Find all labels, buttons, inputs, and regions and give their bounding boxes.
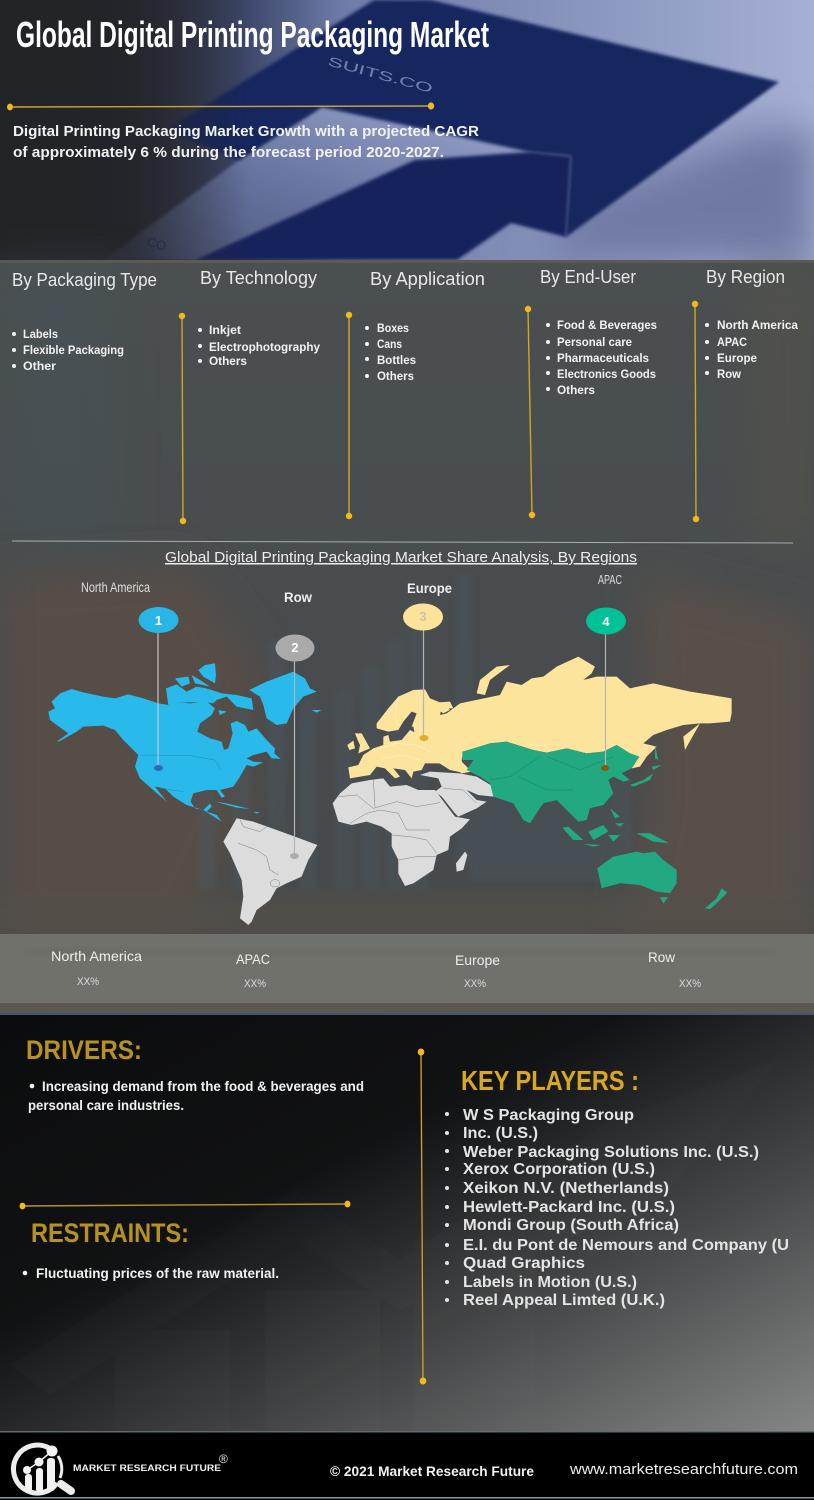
column: By Region: North America — [717, 318, 798, 332]
share legend band: XX% — [464, 978, 486, 990]
column: By End-User: Electronics Goods — [557, 367, 656, 381]
map: Asia Pacific — [462, 742, 727, 909]
map: North America — [48, 663, 322, 822]
column: By Region — [692, 267, 798, 522]
drivers block — [26, 1035, 364, 1113]
column: By Application: Boxes — [377, 321, 409, 335]
share legend band: APAC — [236, 951, 270, 967]
column: By End-User: By End-User — [540, 267, 636, 287]
share legend band: XX% — [77, 976, 99, 988]
column: By Region: APAC — [717, 335, 747, 349]
restraints block — [23, 1218, 279, 1281]
divider: header gold rule — [7, 102, 434, 110]
key players list: Reel Appeal Limted (U.K.) — [463, 1292, 665, 1309]
column: By Application: Others — [377, 369, 414, 383]
panel: drivers, restraints and key players background — [0, 1015, 814, 1431]
column: By Region: Europe — [717, 351, 757, 365]
key players list: Weber Packaging Solutions Inc. (U.S.) — [463, 1144, 759, 1161]
column: By Region: By Region — [706, 267, 785, 287]
key players heading: KEY PLAYERS : — [461, 1065, 639, 1096]
pin 1: North America: 1 — [155, 613, 162, 628]
restraints block: Fluctuating prices of the raw material. — [36, 1265, 279, 1281]
key players list: Labels in Motion (U.S.) — [463, 1274, 637, 1291]
drivers block: Increasing demand from the food & beverages and — [42, 1078, 364, 1094]
column: By End-User: Others — [557, 383, 595, 397]
pin 3: Europe: Europe — [407, 581, 452, 596]
column: By End-User: Personal care — [557, 335, 632, 349]
divider: vertical gold rule — [418, 1048, 426, 1384]
key players list — [445, 1107, 789, 1309]
share legend band: XX% — [679, 978, 701, 990]
footer bar: MARKET RESEARCH FUTURE — [73, 1463, 221, 1474]
column: By End-User: Pharmaceuticals — [557, 351, 649, 365]
key players list: E.I. du Pont de Nemours and Company (U — [463, 1237, 789, 1254]
key players list: Mondi Group (South Africa) — [463, 1217, 679, 1234]
column: By End-User: Food & Beverages — [557, 318, 657, 332]
column: By Region: Row — [717, 367, 742, 381]
key players list: Xerox Corporation (U.S.) — [463, 1161, 655, 1178]
drivers block: DRIVERS: — [26, 1035, 142, 1065]
column: By End-User — [525, 267, 657, 518]
divider: restraints gold rule — [20, 1201, 350, 1209]
drivers block: personal care industries. — [28, 1097, 184, 1113]
pin 1: North America — [81, 579, 178, 771]
key players list: Xeikon N.V. (Netherlands) — [463, 1180, 669, 1197]
key players list: Quad Graphics — [463, 1255, 585, 1272]
subtitle text block — [13, 123, 479, 161]
key players list: Inc. (U.S.) — [463, 1125, 538, 1142]
pin 1: North America: North America — [81, 579, 150, 595]
share legend band — [51, 948, 701, 990]
subtitle text block: of approximately 6 % during the forecast period 2020-2027. — [13, 144, 444, 161]
share legend band: XX% — [244, 978, 266, 990]
title: Global Digital Printing Packaging Market — [16, 14, 489, 55]
column: By Technology: Electrophotography — [209, 340, 320, 354]
key players list: Hewlett-Packard Inc. (U.S.) — [463, 1199, 675, 1216]
column: By Technology: Inkjet — [209, 323, 241, 337]
footer bar: © 2021 Market Research Future — [330, 1463, 534, 1479]
share legend band: Europe — [455, 952, 500, 968]
column: By Packaging Type: By Packaging Type — [12, 270, 157, 290]
world map — [48, 657, 732, 925]
column: By Technology — [179, 268, 320, 524]
pin 2: Row: Row — [284, 590, 312, 605]
share legend band: North America — [51, 948, 142, 964]
pin 2: Row — [276, 590, 314, 859]
pin 4: APAC: 4 — [602, 614, 610, 629]
column: By Packaging Type: Other — [23, 359, 56, 373]
chart heading: Global Digital Printing Packaging Market Share Analysis, By Regions — [165, 549, 637, 566]
column: By Packaging Type: Labels — [23, 327, 58, 341]
icon: market research future logo — [13, 1445, 71, 1493]
footer bar: www.marketresearchfuture.com — [569, 1461, 798, 1478]
column: By Application: Cans — [377, 337, 402, 351]
column: By Technology: Others — [209, 354, 247, 368]
pin 4: APAC: APAC — [598, 572, 622, 587]
map: Europe and Russia — [347, 657, 732, 778]
pin 3: Europe: 3 — [419, 609, 427, 624]
column: By Application — [346, 269, 485, 519]
restraints block: RESTRAINTS: — [31, 1218, 189, 1248]
panel: header background: CO — [145, 234, 168, 254]
footer bar — [0, 1431, 814, 1500]
pin 3: Europe — [403, 581, 452, 741]
footer bar: ® — [219, 1452, 228, 1466]
column: By Technology: By Technology — [200, 268, 317, 288]
column: By Packaging Type — [12, 270, 157, 373]
column: By Packaging Type: Flexible Packaging — [23, 343, 124, 357]
pin 4: APAC — [586, 572, 626, 771]
share legend band: Row — [648, 949, 676, 965]
subtitle text block: Digital Printing Packaging Market Growth with a projected CAGR — [13, 123, 479, 140]
column: By Application: Bottles — [377, 353, 416, 367]
pin 2: Row: 2 — [291, 640, 299, 655]
panel: header background — [0, 0, 814, 260]
column: By Application: By Application — [370, 269, 485, 289]
map: Africa and Middle East — [333, 772, 493, 886]
key players list: W S Packaging Group — [463, 1107, 634, 1124]
map: South America — [223, 818, 317, 925]
panel: segments and map background — [0, 260, 814, 1015]
panel: header background: SUITS.CO — [326, 53, 434, 96]
